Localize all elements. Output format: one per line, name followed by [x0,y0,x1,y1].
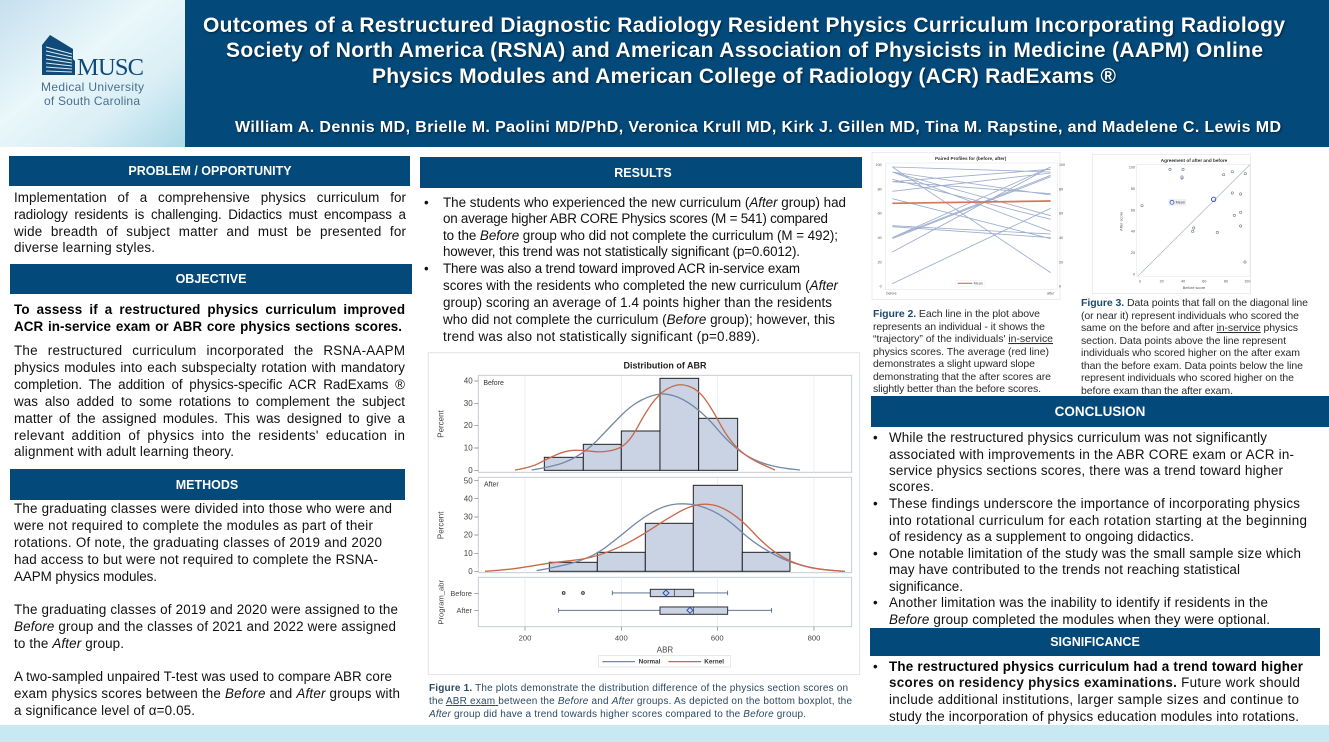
figure 2 caption: slightly better than the before scores. [873,383,1041,395]
chart: paired profiles [872,152,1065,300]
chart: agreement scatter [1092,155,1251,294]
x axis: 200 [519,634,531,643]
histogram: after: After [484,482,499,489]
figure 1 caption [428,683,852,720]
chart: distribution of ABR [428,353,860,675]
axis labels: 80 [1224,280,1228,284]
panel: problem / opportunity [9,156,410,255]
legend [599,656,731,667]
conclusion bullets: may have contributed to the trends not reaching statistical [889,562,1240,577]
chart title: Agreement of after and before [1161,158,1228,163]
figure 1 caption: Figure 1. The plots demonstrate the distribution difference of the physics section scores on [429,683,848,694]
chart: agreement scatter: 100 [1129,166,1135,170]
results bullets: to the Before group who did not complete the curriculum (M = 492); [443,228,838,243]
significance text: The restructured physics curriculum had a trend toward higher [889,659,1304,674]
significance text: study the incorporation of physics education modules into rotations. [889,709,1299,724]
heading: METHODS [176,478,238,492]
methods text: rotations. Of note, the graduating classes of 2019 and 2020 [14,535,382,550]
panel: objective [10,264,412,459]
authors: William A. Dennis MD, Brielle M. Paolini MD/PhD, Veronica Krull MD, Kirk J. Gillen MD, Tina M. Rapstine, and Madelene C. Lewis MD [235,119,1281,136]
legend: Normal [639,659,661,666]
histogram: after: 30 [464,513,473,522]
conclusion bullets: Another limitation was the inability to identify if residents in the [889,595,1268,610]
panel: significance [870,628,1320,724]
title [203,14,1285,88]
methods text: a significance level of α=0.05. [14,703,195,718]
figure 1 caption: the ABR exam between the Before and After groups. As depicted on the bottom boxplot, the [429,696,852,707]
methods text: to the After group. [14,636,124,651]
figure 3 caption: (or near it) represent individuals who scored the [1081,310,1299,322]
chart: agreement scatter: 60 [1131,208,1135,212]
figure 3 caption: before exam than the after exam. [1081,385,1233,397]
objective text: completion. The addition of physics-specific ACR RadExams ® [14,377,405,392]
axis labels: after [1047,292,1055,296]
results bullets: who did not complete the curriculum (Before group); however, this [442,312,835,327]
conclusion bullets: scores. [889,479,934,494]
figure 3 caption: represent individuals who scored higher on the [1081,372,1294,384]
panel: conclusion [871,396,1329,627]
figure 3 caption: individuals who scored higher on the after exam [1081,347,1300,359]
objective statement: To assess if a restructured physics curriculum improved [14,302,405,317]
histogram: before: 30 [464,399,473,408]
axis labels: 100 [876,163,882,167]
mean line [892,201,1051,203]
heading: CONCLUSION [1055,404,1145,419]
figure 3 caption: Figure 3. Data points that fall on the diagonal line [1081,297,1308,309]
bottom band [0,725,1329,742]
conclusion bullets: While the restructured physics curriculum was not significantly [889,430,1267,445]
methods text: had access to but were not required to complete the RSNA- [14,552,378,567]
conclusion bullets: associated with improvements in the ABR CORE exam or ACR in- [889,447,1294,462]
axis labels: 0 [1139,280,1141,284]
objective text: matter of the assigned modules. This was designed to give a [14,411,406,426]
axis labels: 0 [1059,285,1061,289]
chart title: Paired Profiles for (before, after) [935,156,1007,161]
figure 2 caption: physics scores. The average (red line) [873,346,1049,358]
histogram: before: 20 [464,421,473,430]
results bullets: There was also a trend toward improved ACR in-service exam [443,261,800,276]
histogram: before: 40 [464,377,473,386]
conclusion bullets: These findings underscore the importance of incorporating physics [889,496,1300,511]
histogram: before [437,375,852,475]
chart: agreement scatter: 0 [1133,272,1135,276]
results bullets: • [424,195,429,210]
methods text: A two-sampled unpaired T-test was used to compare ABR core [14,669,392,684]
chart: agreement scatter: 80 [1131,187,1135,191]
objective text [13,343,406,459]
x axis: ABR [657,645,673,654]
heading: PROBLEM / OPPORTUNITY [128,164,292,178]
logo subtitle: of South Carolina [44,94,140,108]
boxplot [437,577,852,631]
panel: methods [10,469,405,718]
histogram: before: 0 [468,466,473,475]
methods text: Before group and the classes of 2021 and 2022 were assigned [14,619,396,634]
results bullets: group) scoring an average of 1.4 points higher than the residents [443,295,832,310]
axis labels: 100 [1059,163,1065,167]
results bullets: The students who experienced the new curriculum (After group) had [443,195,846,210]
conclusion bullets: • [873,595,878,610]
methods text: were not required to complete the modules as part of their [13,518,374,533]
axis labels: 20 [1160,280,1164,284]
histogram: before: Percent [437,409,446,438]
significance text: include additional institutions, larger sample sizes and continue to [889,692,1299,707]
axis labels: 40 [1059,236,1063,240]
chart: agreement scatter: 20 [1131,251,1135,255]
axis labels: 60 [1202,280,1206,284]
axis labels: before [886,292,897,296]
problem text: radiology residents is challenging. Didactics must encompass a [14,207,407,222]
conclusion bullets: service physics sections scores, there was a trend toward higher [889,463,1284,478]
figure 2 caption [873,308,1053,395]
problem text [13,190,407,255]
heading: OBJECTIVE [176,272,246,286]
conclusion bullets: into rotational curriculum for each rotation starting at the beginning [889,513,1307,528]
logo wordmark: MUSC [77,54,144,81]
legend: Kernel [704,659,724,666]
chart title: Distribution of ABR [623,360,707,370]
panel: results [420,157,862,344]
conclusion bullets: • [873,546,878,561]
profile lines [892,167,1051,284]
boxplot: Before [450,589,472,598]
boxplot: After [457,606,473,615]
objective text: physics modules into each subspecialty rotation with mandatory [14,360,405,375]
x axis: 400 [615,634,628,643]
methods text: AAPM physics modules. [14,569,157,584]
objective text: relevant addition of physics into the residents' education in [14,428,405,443]
axis labels: 40 [878,236,882,240]
methods text [13,501,400,718]
histogram: after: 40 [464,494,473,503]
chart: agreement scatter: 40 [1131,230,1135,234]
problem text: diverse learning styles. [14,240,155,255]
histogram: after: 50 [464,476,473,485]
figure 3 caption: than the before exam. Data points below the line [1081,360,1303,372]
results bullets: however, this trend was not statistically significant (p=0.6012). [443,244,800,259]
axis labels [876,163,1065,296]
axis labels: After score [1118,211,1123,231]
histogram: after: 20 [464,531,473,540]
axis labels: 0 [880,285,882,289]
scatter points [1141,168,1246,263]
title banner [185,0,1329,147]
methods text: The graduating classes were divided into those who were and [14,501,392,516]
methods text: The graduating classes of 2019 and 2020 were assigned to the [14,602,398,617]
figure 3 caption: same on the before and after in-service physics [1081,322,1298,334]
mean marker [1211,197,1216,201]
boxplot: Program_abr [437,580,446,625]
results bullets: on average higher ABR CORE Physics scores (M = 541) compared [443,211,828,226]
results bullets: scores with the residents who completed the new curriculum (After [443,278,839,293]
conclusion bullets: of residency as a supplement to ongoing didactics. [889,529,1194,544]
logo subtitle: Medical University [41,80,144,94]
axis labels: 80 [878,187,882,191]
x axis [519,634,820,654]
objective text: The restructured curriculum incorporated the RSNA-AAPM [14,343,405,358]
conclusion bullets: significance. [889,579,963,594]
significance text: scores on residency physics examinations. Future work should [889,675,1300,690]
title: Physics Modules and American College of Radiology (ACR) RadExams ® [372,65,1117,88]
legend [956,281,985,286]
heading: RESULTS [614,166,672,180]
figure 2 caption: Figure 2. Each line in the plot above [873,308,1040,320]
conclusion bullets: • [873,496,878,511]
figure 2 caption: represents an individual - it shows the [873,321,1045,333]
figure 2 caption: “trajectory” of the individuals' in-service [873,333,1053,345]
title: Society of North America (RSNA) and American Association of Physicists in Medicine (AAPM) Online [226,39,1263,62]
objective text: was also added to some rotations to complement the subject [13,394,405,409]
objective statement: ACR in-service exam or ABR core physics sections scores. [14,319,402,334]
x axis: 800 [808,634,820,643]
figure 3 caption: section. Data points above the line represent [1081,335,1286,347]
conclusion bullets: One notable limitation of the study was the small sample size which [889,546,1301,561]
title: Outcomes of a Restructured Diagnostic Radiology Resident Physics Curriculum Incorporating Radiology [203,14,1285,37]
logo panel [0,0,185,147]
figure 1 caption: After group did have a trend towards higher scores compared to the Before group. [428,709,806,720]
histogram: after: Percent [437,511,446,539]
x axis: 600 [711,634,724,643]
axis labels: 60 [878,212,882,216]
conclusion bullets: Before group completed the modules when they were optional. [889,612,1270,627]
axis labels: 80 [1059,187,1063,191]
axis labels: 40 [1181,280,1185,284]
conclusion bullets: • [873,430,878,445]
results bullets [424,195,846,344]
axis labels [1118,211,1250,290]
objective text: alignment with adult learning theory. [14,444,234,459]
axis labels: 100 [1244,280,1250,284]
histogram: after: 0 [468,567,473,576]
figure 2 caption: demonstrates a slight upward slope [873,358,1035,370]
conclusion bullets [873,430,1307,627]
significance text [873,659,1304,724]
axis labels: 60 [1059,212,1063,216]
objective statement [14,302,405,334]
icon: MUSC building [42,35,75,75]
logo subtitle [41,80,144,108]
axis labels: 20 [878,260,882,264]
histogram: before: 10 [464,444,473,453]
figure 2 caption: demonstrating that the after scores are [873,371,1051,383]
legend [1168,199,1186,206]
results bullets: trend was also not statistically significant (p=0.889). [443,329,760,344]
problem text: wide breadth of subject matter and must be presented for [13,224,407,239]
results bullets: • [424,261,429,276]
histogram: after [437,476,852,576]
axis labels: 20 [1059,260,1063,264]
figure 3 caption [1081,297,1308,397]
histogram: before: Before [483,380,504,387]
axis labels: Before score [1183,285,1206,290]
heading: SIGNIFICANCE [1050,635,1140,649]
legend: Mean [1176,201,1185,205]
problem text: Implementation of a comprehensive physics curriculum for [14,190,407,205]
significance text: • [873,659,878,674]
methods text: exam physics scores between the Before and After groups with [14,686,400,701]
legend: Mean [974,282,983,286]
histogram: after: 10 [464,549,473,558]
